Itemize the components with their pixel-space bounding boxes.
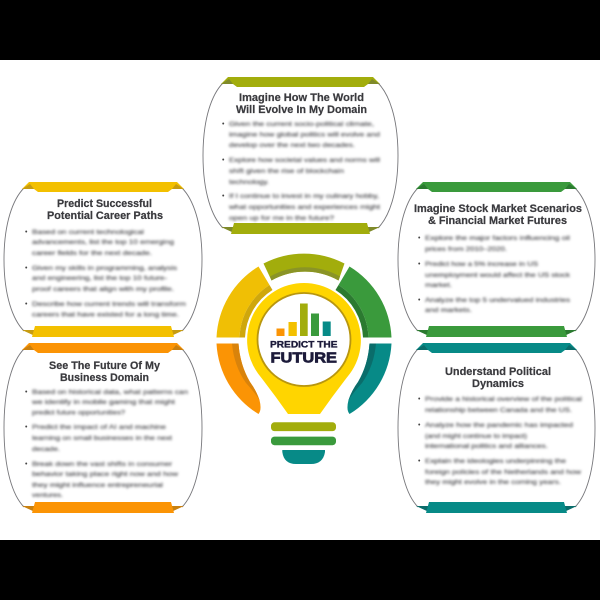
bullet list: shift given the rise of blockchain (229, 168, 344, 175)
bullet list: If I continue to invest in my culinary hobby, (229, 193, 379, 200)
bullet list: ventures. (32, 492, 63, 499)
bullet list: technology. (229, 179, 269, 186)
bullet list: • (222, 121, 225, 128)
bullet list: • (25, 389, 28, 396)
bullet list: develop over the next two decades. (229, 142, 355, 149)
bullet list: learning on small businesses in the next (32, 435, 172, 442)
bullet list (418, 396, 583, 486)
bullet list: unemployment would affect the US stock (425, 272, 571, 279)
bullet list (25, 389, 188, 499)
bullet list (418, 235, 571, 314)
logo text: PREDICT THE (270, 340, 338, 350)
heading: See The Future Of My (49, 360, 161, 372)
panel outline (398, 188, 595, 331)
bullet list: (and might continue to impact) (425, 433, 527, 440)
heading: & Financial Market Futures (428, 215, 567, 227)
bottom band (221, 223, 380, 234)
bulb base: teal cap (282, 450, 325, 464)
bulb body (247, 283, 361, 414)
bullet list: foreign policies of the Netherlands and how (425, 469, 581, 476)
bullet list: • (25, 265, 28, 272)
panel outline (4, 188, 202, 331)
heading: Predict Successful (57, 198, 152, 210)
heading: Imagine Stock Market Scenarios (414, 203, 582, 215)
bullet list: predict future opportunities? (32, 410, 125, 416)
panel: see the future of my business domain (4, 343, 202, 513)
bullet list: what opportunities and experiences might (228, 204, 380, 211)
heading: Understand Political (445, 366, 551, 378)
bulb base: green ring (271, 437, 336, 445)
heading: Dynamics (472, 378, 524, 390)
heading: Business Domain (60, 372, 149, 384)
bullet list: market. (425, 282, 452, 289)
bullet list: Predict how a 5% increase in US (425, 261, 539, 268)
top band (22, 182, 184, 192)
bullet list: Based on current technological (32, 229, 145, 236)
bullet list: • (418, 235, 421, 242)
bullet list: we identify in mobile gaming that might (31, 399, 175, 406)
top band (221, 77, 380, 87)
bullet list: Explore the major factors influencing oil (425, 235, 571, 242)
central lightbulb icon (216, 254, 392, 464)
bullet list: international politics and alliances. (425, 443, 548, 450)
bullet list: Given the current socio-political climate, (229, 121, 374, 128)
bullet list: Analyze how the pandemic has impacted (425, 422, 573, 429)
segment: teal (347, 344, 392, 414)
bullet list: Explain the ideologies underpinning the (425, 458, 566, 465)
heading (49, 360, 161, 384)
bullet list (222, 121, 381, 222)
heading (236, 92, 367, 116)
bottom band (416, 502, 577, 513)
bullet list: • (25, 301, 28, 308)
bullet list: career fields for the next decade. (32, 250, 152, 257)
top band (416, 182, 577, 192)
bulb base: olive ring (271, 422, 336, 431)
bullet list: and markets. (425, 307, 472, 314)
panel: understand political dynamics (398, 343, 595, 513)
bullet list: • (222, 157, 225, 164)
top band (416, 343, 577, 353)
heading (445, 366, 551, 390)
bottom band (22, 326, 184, 337)
bullet list: advancements, list the top 10 emerging (32, 239, 174, 246)
panel: imagine how the world will evolve (203, 77, 398, 234)
panel outline (4, 349, 202, 507)
bottom band (416, 326, 577, 337)
bullet list: imagine how global politics will evolve and (229, 132, 380, 138)
heading: Imagine How The World (239, 92, 364, 104)
bullet list: behavior taking place right now and how (32, 471, 178, 478)
bullet list: Break down the vast shifts in consumer (32, 461, 173, 468)
bullet list: prices from 2010–2020. (425, 246, 507, 253)
bullet list: Analyze the top 5 undervalued industries (425, 297, 571, 304)
logo text: FUTURE (270, 350, 337, 366)
bullet list: • (418, 458, 421, 465)
bullet list: Describe how current trends will transform (32, 301, 186, 308)
segment: orange (216, 344, 261, 414)
bullet list: and engineering, list the top 10 future- (32, 275, 167, 282)
bullet list: Provide a historical overview of the political (425, 396, 583, 403)
bullet list: • (25, 461, 28, 468)
top black bar (0, 0, 600, 60)
bullet list: • (418, 297, 421, 304)
panel: imagine stock market scenarios (398, 182, 595, 337)
bar chart icon (276, 304, 331, 336)
logo text (270, 340, 338, 366)
bullet list: they might evolve in the coming years. (425, 479, 561, 486)
top band (22, 343, 184, 353)
bullet list: • (25, 229, 28, 236)
bullet list (25, 229, 186, 318)
bullet list: open up for me in the future? (229, 215, 334, 222)
panel outline (203, 83, 398, 228)
bullet list: proof careers that align with my profile. (32, 286, 174, 293)
segment: yellow (216, 266, 272, 338)
bullet list: • (418, 261, 421, 268)
bottom band (22, 502, 184, 513)
bullet list: decade. (32, 446, 60, 453)
heading: Potential Career Paths (47, 210, 163, 222)
heading (47, 198, 163, 222)
bullet list: Explore how societal values and norms will (229, 157, 381, 164)
bottom black bar (0, 540, 600, 600)
bullet list: • (418, 396, 421, 403)
bullet list: • (418, 422, 421, 429)
segment: green (336, 266, 392, 338)
bullet list: they might influence entrepreneurial (32, 482, 164, 489)
panel outline (398, 349, 595, 507)
heading: Will Evolve In My Domain (236, 104, 367, 116)
segment: olive (264, 254, 344, 280)
heading (414, 203, 582, 227)
bullet list: relationship between Canada and the US. (425, 407, 572, 414)
panel: predict successful career paths (4, 182, 202, 337)
bullet list: • (25, 424, 28, 431)
bullet list: careers that have existed for a long time. (32, 312, 179, 318)
bulb face ring (258, 293, 350, 386)
bullet list: Predict the impact of AI and machine (32, 424, 166, 431)
bullet list: Given my skills in programming, analysis (32, 265, 178, 272)
bullet list: • (222, 193, 225, 200)
bullet list: Based on historical data, what patterns can (32, 389, 188, 396)
